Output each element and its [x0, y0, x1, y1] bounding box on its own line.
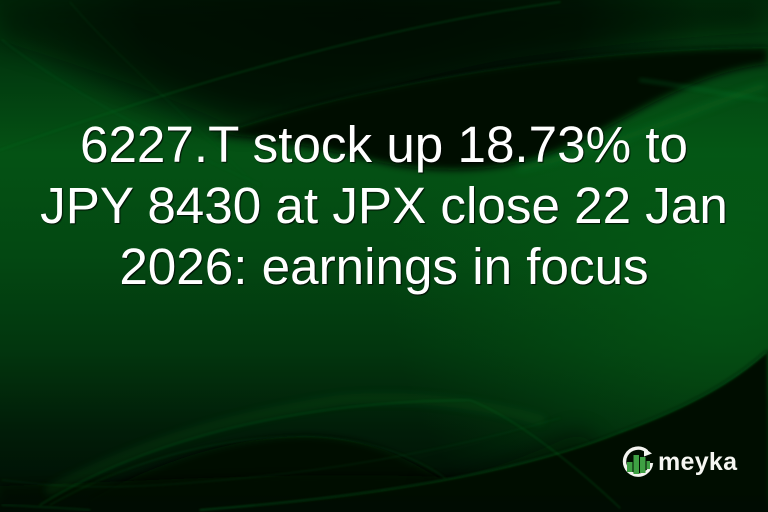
icon: ring with green bars	[622, 446, 654, 477]
top darkness	[0, 0, 768, 170]
title	[40, 116, 728, 296]
title: 2026: earnings in focus	[119, 238, 649, 295]
lower dark hill	[90, 436, 470, 512]
logo: meyka	[622, 446, 738, 477]
lower strands	[50, 436, 445, 505]
wordmark: meyka	[658, 448, 737, 476]
right bottom darkness	[560, 398, 768, 512]
title: 6227.T stock up 18.73% to	[80, 116, 688, 173]
title: JPY 8430 at JPX close 22 Jan	[40, 177, 728, 234]
